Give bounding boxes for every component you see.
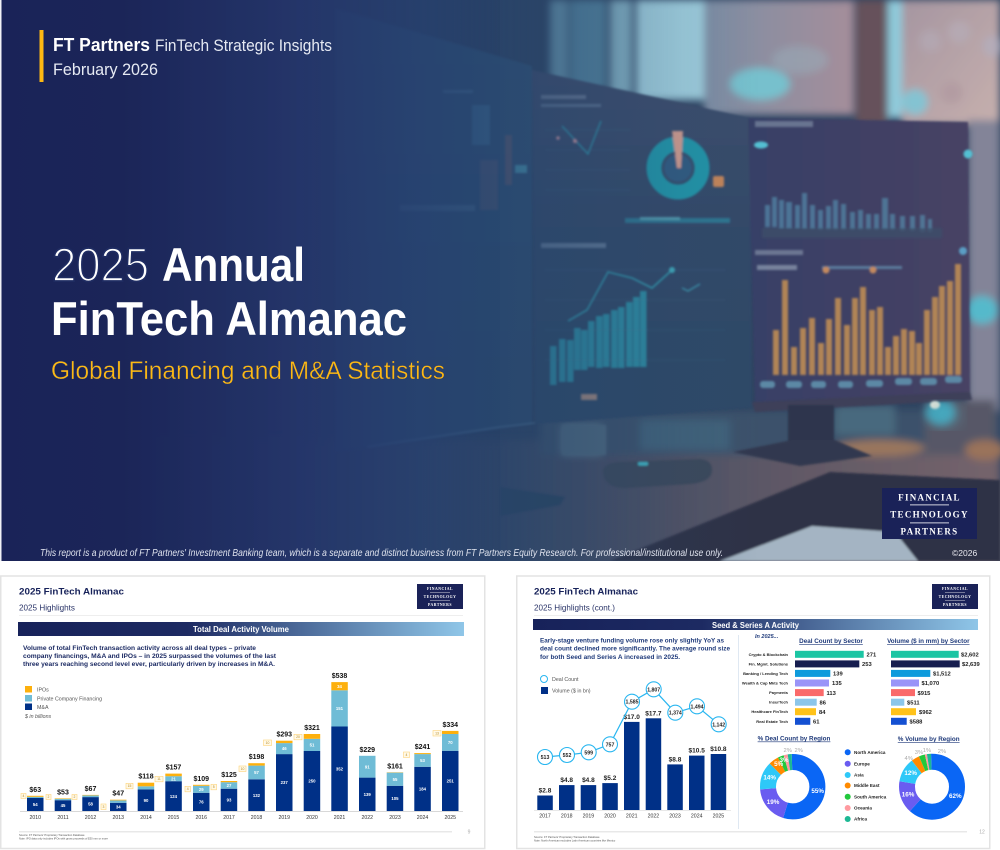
donut: volume by region: 4% bbox=[905, 756, 913, 762]
bar 2019: 2019 bbox=[278, 815, 290, 821]
bar chart: volume by sector: $2,602 bbox=[961, 652, 979, 658]
legend bbox=[24, 686, 102, 720]
bar 2022: 2022 bbox=[361, 815, 373, 821]
bar 2012: $67 bbox=[85, 786, 96, 793]
bar 2021: 2021 bbox=[626, 814, 638, 820]
heading: 2025 Highlights (cont.) bbox=[534, 604, 615, 612]
bar 2010: 54 bbox=[33, 802, 38, 807]
donut: volume by region: 12% bbox=[904, 770, 917, 777]
desk objects bbox=[500, 401, 1000, 561]
background photo: desk with monitors bbox=[254, 0, 1000, 561]
bar 2011 bbox=[46, 789, 71, 821]
bar 2017: 2017 bbox=[539, 814, 551, 820]
heading: 2025 FinTech Almanac bbox=[19, 586, 124, 598]
donut: volume by region bbox=[902, 748, 962, 812]
eyebrow: FT Partners: FT Partners bbox=[53, 35, 150, 55]
line chart: deal count: 757 bbox=[606, 742, 614, 748]
bar 2021: 34 bbox=[337, 684, 342, 689]
donut: volume by region: 3% bbox=[915, 750, 923, 756]
donut: deal count by region: 2% bbox=[784, 748, 792, 754]
sector labels: Crypto & Blockchain bbox=[749, 652, 789, 657]
bar 2024 bbox=[404, 744, 431, 821]
source note bbox=[534, 835, 616, 842]
page number: 12 bbox=[979, 830, 985, 836]
donut: deal count by region: 2% bbox=[795, 748, 803, 754]
line chart: deal count: 599 bbox=[584, 750, 593, 756]
description text: for both Seed and Series A increased in 2025. bbox=[540, 654, 680, 661]
bar 2022: $17.7 bbox=[645, 710, 662, 717]
heading bbox=[19, 586, 124, 612]
page number: 9 bbox=[468, 830, 471, 836]
navy left gradient overlay bbox=[2, 0, 720, 561]
bar 2021: 151 bbox=[336, 706, 344, 711]
bar 2017 bbox=[537, 788, 553, 820]
heading: 2025 FinTech Almanac bbox=[534, 586, 638, 598]
bar 2016: $109 bbox=[193, 776, 209, 783]
bar 2018: 2018 bbox=[251, 815, 262, 821]
legend: $ in billions bbox=[24, 714, 52, 720]
donut: volume by region: 2% bbox=[938, 749, 946, 755]
sector labels: InsurTech bbox=[769, 700, 789, 705]
bar chart: volume by sector: $915 bbox=[918, 691, 931, 697]
sector labels: Real Estate Tech bbox=[756, 719, 789, 724]
bar chart: volume by sector: $588 bbox=[910, 720, 923, 726]
bar 2017: 2017 bbox=[223, 815, 235, 821]
bar 2019 bbox=[264, 732, 292, 821]
bar chart: volume by sector bbox=[891, 651, 981, 726]
source note: Note: North American excludes Latin American countries like Mexico bbox=[534, 838, 616, 842]
logo bbox=[932, 584, 978, 609]
bar 2015 bbox=[155, 765, 182, 821]
bar 2024: 2024 bbox=[691, 814, 703, 820]
main title: Annual bbox=[162, 238, 305, 291]
bar chart: deal count by sector: 139 bbox=[833, 672, 843, 678]
bar 2025: 251 bbox=[447, 778, 454, 784]
logo: TECHNOLOGY bbox=[424, 595, 456, 599]
logo: Financial Technology Partners bbox=[882, 488, 977, 539]
logo: TECHNOLOGY bbox=[939, 595, 971, 599]
bar 2021 bbox=[331, 673, 348, 821]
label: In 2025: In 2025... bbox=[755, 634, 779, 640]
sector labels: Healthcare FinTech bbox=[751, 709, 789, 714]
bar 2012: 2 bbox=[74, 795, 76, 799]
source note: Source: FT Partners' Proprietary Transaction Database bbox=[19, 833, 85, 837]
bar 2019: $293 bbox=[276, 732, 292, 739]
bar 2018: 57 bbox=[254, 770, 259, 775]
bar chart: volume by sector: $1,512 bbox=[933, 672, 951, 678]
bar chart: deal count by sector: 84 bbox=[819, 710, 826, 716]
bar 2012: 58 bbox=[88, 802, 93, 807]
bar 2024: 2024 bbox=[417, 815, 428, 821]
stacked bar chart bbox=[20, 673, 463, 821]
bar 2019: 2019 bbox=[583, 814, 594, 820]
legend: Volume ($ in bn) bbox=[552, 688, 591, 694]
bar 2022 bbox=[359, 747, 376, 821]
bar 2025: 70 bbox=[448, 740, 453, 745]
logo bbox=[417, 584, 463, 609]
bar 2016: 4 bbox=[187, 787, 189, 791]
bar chart: volume by sector: $511 bbox=[907, 700, 920, 706]
bar 2025 bbox=[433, 722, 458, 821]
bar 2021: 352 bbox=[336, 766, 344, 771]
bar 2025 bbox=[710, 746, 727, 820]
bar 2024: 4 bbox=[406, 753, 408, 757]
bar 2020: 51 bbox=[310, 742, 315, 748]
logo: FINANCIAL bbox=[942, 587, 968, 591]
disclaimer: This report is a product of FT Partners' Investment Banking team, which is a separate and distinct business from FT Partners Equity Research. For professional/institutional use only. bbox=[40, 547, 723, 559]
bar 2014: 2014 bbox=[140, 815, 152, 821]
bar 2020: 2020 bbox=[306, 815, 318, 821]
bar 2010: $63 bbox=[29, 787, 41, 794]
description text: three years reaching second level ever, particularly driven by increases in M&A. bbox=[23, 661, 275, 668]
line chart: deal count: 1,494 bbox=[691, 704, 704, 710]
bar 2020: $321 bbox=[304, 725, 320, 732]
bar 2016: 76 bbox=[199, 800, 204, 804]
region legend bbox=[845, 749, 887, 822]
logo: FINANCIAL bbox=[427, 587, 453, 591]
description text: Early-stage venture funding volume rose only slightly YoY as bbox=[540, 638, 724, 644]
bar 2015: 21 bbox=[171, 776, 176, 781]
bar 2018: $198 bbox=[249, 754, 264, 761]
bar 2011: $53 bbox=[57, 789, 69, 796]
bar 2012: 2012 bbox=[85, 815, 96, 821]
bar 2010: 4 bbox=[23, 794, 25, 798]
line chart: deal count bbox=[538, 682, 726, 764]
bar 2025: 13 bbox=[435, 732, 439, 736]
sector labels: Fin. Mgmt. Solutions bbox=[749, 661, 789, 666]
region legend: Oceania bbox=[854, 806, 872, 811]
bar 2020: 250 bbox=[308, 778, 316, 784]
bar 2014 bbox=[126, 774, 154, 821]
eyebrow: FT Partners: February 2026 bbox=[53, 60, 158, 79]
logo: Financial Technology Partners: PARTNERS bbox=[901, 526, 958, 536]
source note bbox=[19, 833, 108, 840]
bar 2013: 34 bbox=[116, 804, 121, 810]
monitor chart details bbox=[463, 91, 974, 430]
bar 2014: 15 bbox=[128, 784, 131, 788]
bar chart: deal count by sector: 113 bbox=[826, 691, 837, 697]
bar chart: volume by sector: $962 bbox=[919, 710, 932, 716]
bar 2025: $334 bbox=[442, 722, 458, 729]
bar 2025: $10.8 bbox=[710, 746, 727, 753]
bar 2018: $4.8 bbox=[560, 777, 573, 784]
bar 2015: 2015 bbox=[168, 815, 179, 821]
bar chart: volume by sector: $1,070 bbox=[922, 681, 939, 687]
bar 2023: 2023 bbox=[669, 814, 681, 820]
bar 2022: $229 bbox=[359, 747, 375, 754]
bar 2022 bbox=[645, 710, 662, 820]
bar 2023: 55 bbox=[393, 777, 398, 782]
donut: deal count by region: 55% bbox=[811, 788, 824, 795]
bar 2023 bbox=[387, 763, 403, 821]
bar 2018: 2018 bbox=[561, 814, 573, 820]
donut: deal count by region: 19% bbox=[767, 799, 780, 806]
donut: deal count by region bbox=[763, 748, 824, 811]
bar 2011: 2 bbox=[48, 795, 50, 799]
description text: company financings, M&A and IPOs – in 2025 surpassed the volumes of the last bbox=[23, 653, 277, 660]
bar 2022: 139 bbox=[364, 792, 371, 797]
sector labels: Wealth & Cap Mkts Tech bbox=[742, 680, 789, 686]
bar 2021 bbox=[624, 714, 640, 820]
line chart: deal count: 1,585 bbox=[626, 700, 639, 706]
region legend: South America bbox=[854, 794, 887, 799]
bar 2021: $538 bbox=[332, 673, 347, 680]
legend: M&A bbox=[37, 705, 49, 711]
bar 2020 bbox=[602, 775, 618, 820]
bar 2019: 46 bbox=[282, 746, 287, 751]
bar 2016: 29 bbox=[199, 787, 204, 792]
bar 2015: $157 bbox=[166, 765, 181, 772]
region legend: Africa bbox=[854, 817, 867, 822]
bar 2023: $161 bbox=[387, 763, 403, 770]
bar 2023: 2023 bbox=[389, 815, 401, 821]
subtitle: Global Financing and M&A Statistics bbox=[51, 357, 445, 385]
bar 2011: 45 bbox=[61, 803, 66, 808]
bar 2012 bbox=[72, 786, 99, 821]
bar chart: deal count by sector: 271 bbox=[866, 652, 877, 658]
sector labels bbox=[742, 652, 789, 724]
bar 2019 bbox=[581, 777, 596, 820]
bar 2014: $118 bbox=[138, 774, 154, 781]
bar chart: volume by sector: $2,639 bbox=[962, 662, 981, 668]
bar 2025: 2025 bbox=[713, 814, 724, 820]
donut: deal count by region: 5% bbox=[774, 761, 784, 768]
logo: Financial Technology Partners: TECHNOLOGY bbox=[890, 510, 969, 520]
line chart: deal count: 1,374 bbox=[669, 711, 682, 717]
bar 2017: $125 bbox=[221, 772, 237, 779]
legend: Deal Count bbox=[552, 677, 579, 683]
bar 2013: 2013 bbox=[112, 815, 124, 821]
line chart: deal count: 513 bbox=[541, 755, 549, 761]
bar 2015: 11 bbox=[157, 777, 161, 781]
bar 2017: 5 bbox=[213, 785, 215, 789]
eyebrow: FT Partners bbox=[53, 35, 332, 79]
region legend: Middle East bbox=[854, 783, 880, 788]
heading: % volume by region: % Volume by Region bbox=[898, 736, 960, 743]
legend: Private Company Financing bbox=[37, 696, 102, 702]
bar 2024: 53 bbox=[420, 758, 425, 763]
bar 2017: $2.8 bbox=[539, 788, 552, 794]
bar 2025: 2025 bbox=[444, 815, 456, 821]
bar 2019: 10 bbox=[266, 741, 269, 745]
bar 2013 bbox=[101, 791, 126, 821]
description text bbox=[23, 645, 277, 668]
line chart: deal count: 1,807 bbox=[647, 687, 660, 693]
line chart: deal count: 552 bbox=[563, 753, 571, 759]
bar chart: deal count by sector: 253 bbox=[862, 662, 872, 668]
section band bbox=[18, 622, 464, 636]
bar 2015: 124 bbox=[170, 794, 178, 799]
bar 2013: 3 bbox=[103, 805, 105, 809]
section band: Seed & Series A Activity bbox=[712, 621, 800, 630]
heading: % deal count by region: % Deal Count by Region bbox=[758, 736, 831, 742]
donut: deal count by region: 14% bbox=[763, 774, 776, 781]
bar 2017 bbox=[211, 772, 237, 821]
bar chart: volume bbox=[534, 710, 731, 820]
bar 2020: 20 bbox=[296, 735, 300, 739]
bar 2019: $4.8 bbox=[582, 777, 595, 784]
source note: Source: FT Partners' Proprietary Transaction Database bbox=[534, 835, 600, 839]
source note: Note: IPO data only includes IPOs with gross proceeds of $30 mm or more bbox=[19, 836, 108, 840]
region legend: North America bbox=[854, 750, 886, 755]
logo: Financial Technology Partners: FINANCIAL bbox=[898, 492, 961, 502]
bar 2016 bbox=[185, 776, 210, 821]
hero banner bbox=[0, 0, 1000, 565]
line chart: deal count: 1,142 bbox=[712, 722, 725, 728]
bar 2018: 132 bbox=[253, 793, 261, 798]
bar 2024 bbox=[689, 748, 705, 820]
bar chart: deal count by sector bbox=[795, 651, 877, 726]
eyebrow: FT Partners: FinTech Strategic Insights bbox=[155, 36, 332, 55]
section band bbox=[533, 619, 978, 630]
bar 2024: 184 bbox=[419, 786, 427, 792]
bar 2022: 2022 bbox=[648, 814, 659, 820]
bar chart: deal count by sector: 61 bbox=[813, 720, 820, 726]
description text: Volume of total FinTech transaction activity across all deal types – private bbox=[23, 645, 257, 652]
bar chart: deal count by sector: 135 bbox=[832, 681, 842, 687]
bar 2018 bbox=[559, 777, 574, 820]
bar 2023: 105 bbox=[391, 796, 399, 801]
bar 2017: 27 bbox=[227, 783, 232, 788]
main title: 2025 bbox=[52, 238, 149, 291]
donut: volume by region: 16% bbox=[902, 792, 915, 799]
bar 2018 bbox=[239, 754, 265, 821]
description text bbox=[540, 638, 730, 661]
legend: IPOs bbox=[37, 688, 49, 694]
region legend: Europe bbox=[854, 761, 870, 766]
bar 2024: $10.5 bbox=[689, 748, 705, 755]
bar 2014: 90 bbox=[144, 798, 149, 803]
heading: volume by sector: Volume ($ in mm) by Sector bbox=[887, 638, 970, 645]
main title bbox=[54, 246, 406, 336]
donut: deal count by region: 3% bbox=[779, 757, 789, 764]
panel: Total Deal Activity Volume slide bbox=[1, 576, 485, 848]
bar 2022: 91 bbox=[365, 764, 370, 769]
heading bbox=[534, 586, 638, 612]
description text: deal count declined more significantly. The average round size bbox=[540, 646, 730, 652]
heading: 2025 Highlights bbox=[19, 604, 75, 612]
sector labels: Banking / Lending Tech bbox=[743, 671, 789, 676]
bar 2010 bbox=[21, 787, 44, 821]
heading: deal count by sector: Deal Count by Sector bbox=[799, 638, 863, 645]
bar 2010: 2010 bbox=[29, 815, 41, 821]
bar 2011: 2011 bbox=[57, 815, 69, 821]
bar 2020 bbox=[294, 725, 320, 821]
section band: Total Deal Activity Volume bbox=[193, 625, 290, 634]
logo: PARTNERS bbox=[428, 603, 452, 607]
bar 2019: 237 bbox=[281, 780, 288, 785]
donut: volume by region: 1% bbox=[923, 748, 931, 754]
bar 2023 bbox=[667, 756, 683, 820]
bar 2016: 2016 bbox=[195, 815, 207, 821]
sector labels: Payments bbox=[769, 690, 789, 695]
bar 2023: $8.8 bbox=[669, 756, 682, 763]
panel: Seed & Series A Activity slide bbox=[517, 576, 990, 848]
legend bbox=[540, 676, 591, 694]
main title: FinTech Almanac bbox=[51, 292, 407, 345]
bar chart: deal count by sector: 86 bbox=[820, 700, 827, 706]
bar 2024: $241 bbox=[415, 744, 430, 751]
bar 2021: 2021 bbox=[334, 815, 345, 821]
copyright: ©2026 bbox=[952, 548, 977, 558]
monitors bbox=[470, 51, 973, 467]
bar 2018: 10 bbox=[241, 767, 244, 771]
donut: volume by region: 62% bbox=[949, 793, 962, 800]
logo: PARTNERS bbox=[943, 603, 967, 607]
bar 2020: $5.2 bbox=[604, 775, 617, 782]
bar 2020: 2020 bbox=[604, 814, 616, 820]
accent bar bbox=[40, 30, 44, 82]
region legend: Asia bbox=[854, 773, 864, 778]
bar 2021: $17.0 bbox=[624, 714, 640, 721]
bar 2013: $47 bbox=[112, 791, 124, 798]
bar 2017: 93 bbox=[227, 798, 232, 802]
